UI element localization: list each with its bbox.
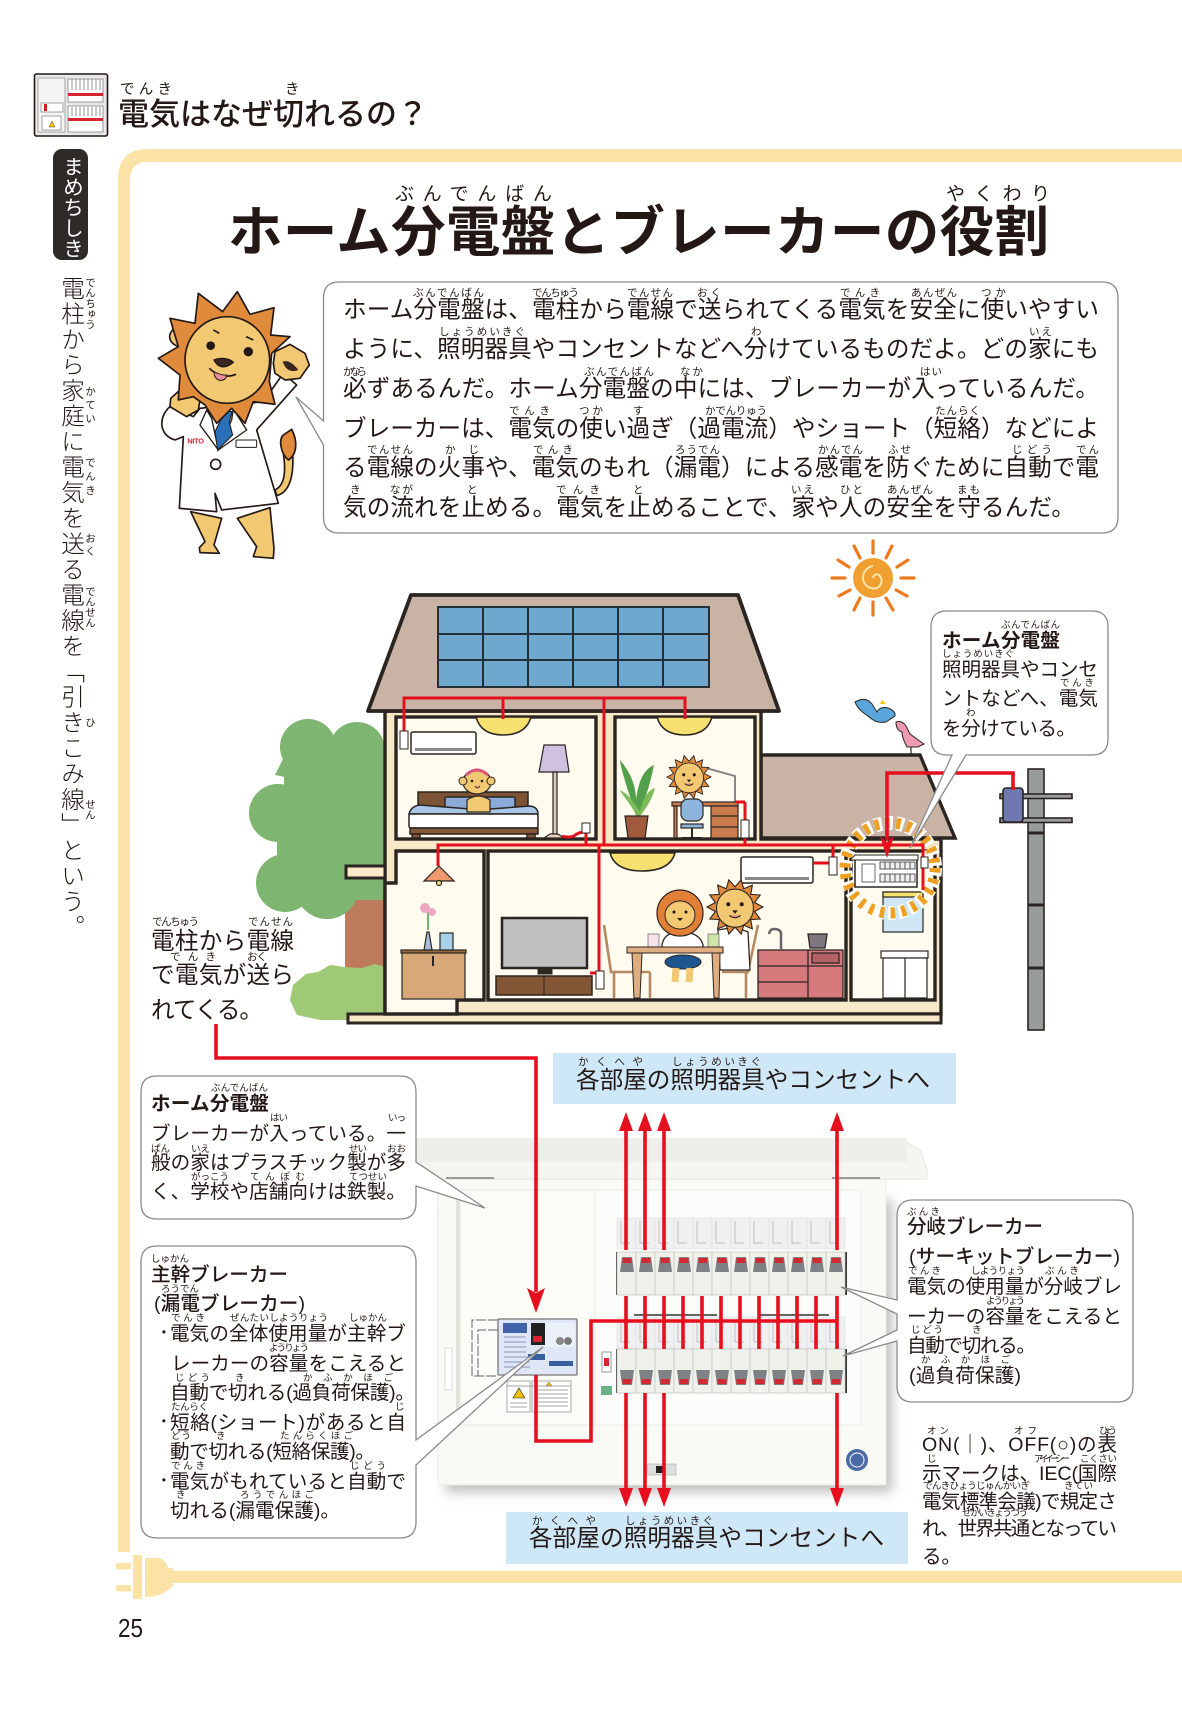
callout: main breaker: たんらく (171, 1402, 208, 1413)
ceiling lights (476, 717, 712, 871)
speech bubble: explanation: ぶんでんばん (413, 287, 484, 299)
callout: home board construction: はい (270, 1113, 288, 1124)
top blue label (553, 1053, 956, 1104)
rooms (385, 717, 935, 1014)
left label: power arrives from pole: 電柱から電線 (151, 928, 294, 955)
callout: home board purpose: を分けている。 (942, 718, 1076, 740)
table (627, 947, 723, 998)
speech bubble: explanation: でんせん (367, 444, 413, 456)
electric pole (1000, 769, 1072, 1030)
left label: power arrives from pole: でんき (170, 951, 216, 963)
tree (249, 719, 385, 1020)
lid (417, 1139, 927, 1179)
icon: distribution board (34, 74, 108, 136)
air conditioners (411, 732, 813, 883)
speech bubble: explanation: かんでん (818, 444, 863, 456)
vertical side note: おく (84, 533, 96, 558)
speech bubble: explanation: でんき (533, 444, 573, 456)
callout: main breaker: き (235, 1373, 245, 1384)
callout: branch breaker: 自動で切れる。 (907, 1335, 1036, 1357)
lion mascot in lab coat: NITO (187, 436, 204, 445)
section heading: why does electricity cut out: き (285, 81, 300, 98)
callout: home board construction: ぱん (151, 1144, 170, 1155)
left label: power arrives from pole: おく (247, 951, 267, 963)
speech bubble: explanation: ひと (840, 484, 863, 496)
speech bubble: explanation: かじ (445, 444, 479, 456)
tag: mamechishiki (53, 149, 88, 260)
incoming line arrow to main breaker (216, 1024, 545, 1313)
speech bubble: explanation: じどう (1012, 444, 1052, 456)
callout: home board purpose: ホーム分電盤 (942, 630, 1060, 652)
callout: branch breaker: しようりょう (971, 1266, 1025, 1277)
callout: home board construction: ぶんでんばん (211, 1083, 268, 1094)
top blue label: しょうめいきぐ (672, 1056, 761, 1068)
speech bubble: explanation: いえ (1029, 326, 1052, 338)
indoor wiring (404, 698, 923, 973)
speech bubble: explanation: まも (957, 484, 980, 496)
speech bubble: explanation: 気の流れを止める。電気を止めることで、家や人の安全を守るんだ。 (343, 494, 1075, 522)
callout: branch breaker: (サーキットブレーカー) (909, 1245, 1120, 1268)
plant (620, 760, 655, 838)
coat (162, 373, 297, 512)
callout: main breaker: ･ (159, 1411, 169, 1433)
callout: main breaker: ぜんたいしようりょう (230, 1313, 328, 1324)
callout: main breaker: ･ (159, 1322, 169, 1344)
callout: home board construction: がっこう (191, 1171, 229, 1183)
speech bubble: explanation: ブレーカーは、電気の使い過ぎ（過電流）やショート（短絡）などによ (343, 416, 1099, 442)
floor slab (348, 1014, 941, 1023)
cups (648, 934, 659, 947)
left label: power arrives from pole: でんせん (248, 916, 293, 928)
callout: main breaker: 主幹ブレーカー (151, 1263, 288, 1286)
vertical side note: でんき (84, 457, 96, 499)
yellow page frame with plug (116, 149, 1182, 1599)
section heading: why does electricity cut out (118, 81, 428, 132)
callout: home board construction: ホーム分電盤 (151, 1093, 269, 1115)
callout: branch breaker: でんき (908, 1266, 941, 1277)
side note: IEC marks: れ、世界共通となってい (922, 1518, 1117, 1540)
side note: IEC marks: でんきひょうじゅんかいぎ (923, 1480, 1030, 1492)
inner cover (460, 1190, 861, 1425)
child lion body (662, 932, 703, 952)
circuit label strips (617, 1218, 845, 1348)
side note: IEC marks: 示マークは、IEC(国際 (922, 1463, 1117, 1485)
callout: home board construction (141, 1076, 485, 1219)
skirt and legs (665, 955, 701, 969)
callout: main breaker: ろうでんほご (240, 1489, 314, 1501)
sockets (400, 731, 928, 989)
callout: branch breaker: ぶんき (1045, 1266, 1079, 1277)
bottom blue label: かくへや (532, 1515, 596, 1527)
callout: branch breaker: (過負荷保護) (909, 1365, 1021, 1387)
vertical side note: 電柱から家庭に電気を送る電線を「引きこみ線」という。 (57, 276, 85, 940)
callout: main breaker: しゅかん (349, 1313, 387, 1324)
bottom blue label: 各部屋の照明器具やコンセントへ (529, 1525, 884, 1552)
speech bubble: explanation: たんらく (935, 405, 980, 417)
branch wiring (536, 1128, 837, 1490)
vertical side note (57, 276, 96, 940)
speech bubble: explanation: しょうめいきぐ (439, 326, 525, 338)
panel body (438, 1179, 886, 1485)
solar panels (438, 607, 709, 687)
side note: IEC marks: じ (927, 1454, 937, 1465)
lower branch breakers (616, 1349, 847, 1393)
speech bubble: explanation: す (633, 405, 644, 417)
side roof (761, 755, 955, 838)
side note: IEC marks: ON(｜)、OFF(○)の表 (922, 1433, 1117, 1456)
top blue label: 各部屋の照明器具やコンセントへ (576, 1067, 930, 1094)
callout: home board purpose: ぶんでんばん (1001, 620, 1060, 631)
speech bubble: explanation: かなら (343, 366, 367, 378)
callout: main breaker: ようりょう (269, 1343, 309, 1354)
speech bubble: explanation: ホーム分電盤は、電柱から電線で送られてくる電気を安全に使いやすい (343, 296, 1099, 324)
left label: power arrives from pole (151, 916, 294, 1024)
father lion body (718, 927, 750, 970)
panel shadow (446, 1200, 892, 1492)
callout: main breaker: じどう (350, 1461, 386, 1472)
pink bird (896, 722, 924, 747)
callout: home board purpose: ントなどへ、電気 (942, 688, 1098, 710)
washroom (881, 892, 928, 998)
speech bubble: explanation: でんき (509, 405, 550, 417)
callout: branch breaker: 電気の使用量が分岐ブレ (907, 1275, 1122, 1298)
callout: main breaker: ろうでん (161, 1284, 199, 1295)
hinges (446, 1177, 880, 1179)
callout: main breaker: 自動で切れる(過負荷保護)。 (170, 1382, 415, 1404)
speech bubble: explanation: でんき (840, 287, 880, 299)
bottom blue label (506, 1512, 908, 1564)
speech bubble: explanation: ように、照明器具やコンセントなどへ分けているものだよ。どの家にも (343, 336, 1099, 363)
callout: main breaker: 電気がもれていると自動で (170, 1471, 406, 1493)
board glow ring (845, 823, 935, 913)
speech bubble: explanation: つか (579, 405, 604, 417)
side note: IEC marks: せかいきょうつう (962, 1508, 1028, 1519)
side note: IEC marks: アイイーシー (1034, 1454, 1070, 1465)
speech bubble: explanation: と (467, 484, 478, 496)
vertical side note: でんせん (84, 586, 96, 628)
speech bubble: explanation: わ (751, 326, 762, 338)
page number: 25 (118, 1613, 143, 1643)
desk with lamp and lion (672, 768, 738, 838)
vertical side note: かてい (84, 386, 96, 426)
callout: branch breaker: ようりょう (986, 1296, 1025, 1307)
callout: main breaker: 切れる(漏電保護)。 (170, 1500, 340, 1522)
speech bubble: explanation: でんせん (627, 287, 673, 299)
callout: main breaker: でんき (171, 1313, 205, 1324)
side note: IEC marks: オン (927, 1426, 949, 1437)
upper branch breakers (616, 1252, 847, 1295)
vertical side note: ひ (84, 717, 96, 728)
kitchen (758, 934, 843, 998)
speech bubble: explanation: 必ずあるんだ。ホーム分電盤の中には、ブレーカーが入っているんだ。 (343, 376, 1099, 402)
cabinet with vase (401, 932, 466, 999)
callout: home board construction: 般の家はプラスチック製が多 (151, 1152, 406, 1174)
callout: home board purpose (910, 611, 1108, 848)
callout: main breaker: レーカーの容量をこえると (171, 1353, 406, 1375)
callout: main breaker: ･ (159, 1470, 169, 1492)
callout: main breaker: き (216, 1431, 226, 1442)
main title: やくわり (946, 183, 1050, 205)
main title: ぶんでんばん (395, 183, 552, 205)
callout: home board construction: てつせい (349, 1172, 387, 1183)
service line from pole with arrow (880, 773, 1013, 858)
switchboard (417, 1112, 927, 1507)
callout: branch breaker (841, 1200, 1133, 1402)
right leg (237, 508, 274, 558)
callout: main breaker: しゅかん (151, 1254, 189, 1265)
lion mascot in lab coat (158, 292, 309, 558)
left label: power arrives from pole: でんちゅう (152, 916, 199, 928)
main roof (368, 595, 779, 711)
callout: branch breaker: ーカーの容量をこえると (907, 1306, 1122, 1328)
chairs (604, 925, 758, 998)
house body (385, 711, 941, 1014)
on off mark (601, 1352, 612, 1395)
floor lamp (539, 745, 569, 838)
callout: main breaker: 短絡(ショート)があると自 (170, 1412, 406, 1434)
callout: main breaker: (漏電ブレーカー) (154, 1292, 305, 1315)
speech bubble: explanation: でんちゅう (532, 287, 579, 299)
side note: IEC marks: こくさい (1080, 1454, 1117, 1465)
speech bubble: explanation: き (350, 484, 360, 496)
speech bubble: explanation: なか (680, 366, 704, 378)
left label: power arrives from pole: で電気が送ら (151, 962, 294, 989)
balcony stub (346, 866, 385, 878)
speech bubble: explanation: かでんりゅう (705, 405, 767, 417)
main breaker (472, 1319, 577, 1376)
speech bubble: explanation: はい (920, 366, 942, 378)
speech bubble: explanation: ろうでん (675, 444, 720, 456)
callout: main breaker: でんき (171, 1461, 205, 1472)
bottom blue label: しょうめいきぐ (625, 1515, 713, 1527)
side note: IEC marks: オフ (1014, 1426, 1037, 1437)
tag: mamechishiki: まめちしき (60, 156, 83, 258)
side note: IEC marks: 電気標準会議)で規定さ (922, 1491, 1117, 1513)
callout: main breaker: じ (395, 1402, 405, 1413)
callout: main breaker: じどう (175, 1373, 210, 1384)
speech bubble: explanation: ふせ (888, 444, 911, 456)
home distribution board in house (850, 855, 918, 887)
callout: home board construction: てんぽむ (250, 1172, 305, 1183)
warning labels (507, 1381, 571, 1412)
callout: main breaker: どう (171, 1431, 191, 1442)
callout: home board construction: いえ (191, 1144, 210, 1155)
callout: main breaker: 動で切れる(短絡保護)。 (170, 1441, 375, 1463)
side note: IEC marks: る。 (922, 1546, 961, 1568)
callout: main breaker (141, 1246, 543, 1538)
callout: home board purpose: 照明器具やコンセ (942, 659, 1098, 681)
birds (855, 699, 924, 754)
icon: sun (832, 541, 914, 615)
side note: IEC marks: きてい (1064, 1481, 1093, 1492)
callout: home board construction: く、学校や店舗向けは鉄製。 (151, 1181, 406, 1203)
speech bubble: explanation: あんぜん (887, 484, 933, 496)
television (496, 918, 592, 995)
dining set with family (604, 880, 763, 998)
callout: home board purpose: でんき (1060, 678, 1094, 689)
house cross-section (346, 595, 1072, 1030)
callout: branch breaker: ぶんき (907, 1207, 940, 1218)
speech bubble: explanation: ぶんでんばん (584, 366, 654, 378)
speech bubble: explanation: あんぜん (911, 287, 957, 299)
speech bubble: explanation (296, 282, 1118, 533)
speech bubble: explanation: つか (981, 287, 1006, 299)
callout: branch breaker: かふかほご (921, 1354, 1010, 1366)
callout: branch breaker: じどう (911, 1325, 943, 1336)
callout: main breaker: 電気の全体使用量が主幹ブ (170, 1322, 406, 1345)
callout: home board purpose: わ (966, 708, 976, 719)
callout: home board construction: せい (349, 1144, 367, 1155)
callout: branch breaker: 分岐ブレーカー (907, 1215, 1043, 1238)
hanging lamp (424, 866, 454, 886)
vertical side note: せん (84, 799, 96, 820)
main title: ホーム分電盤とブレーカーの役割 (228, 202, 1049, 263)
left leg (191, 512, 222, 553)
down arrows (619, 1488, 844, 1507)
tail (275, 453, 293, 496)
speech bubble: explanation: おく (697, 287, 721, 299)
callout: main breaker: かふかほご (303, 1372, 393, 1384)
speech bubble: explanation: と (633, 484, 644, 496)
speech bubble: explanation: でん (1076, 444, 1099, 456)
speech bubble: explanation: いえ (791, 484, 814, 496)
callout: main breaker: たんらくほご (280, 1430, 353, 1442)
section heading: why does electricity cut out: 電気はなぜ切れるの？ (118, 97, 428, 132)
side note: IEC marks: ひょう (1099, 1426, 1117, 1437)
section heading: why does electricity cut out: でんき (120, 81, 172, 98)
speech bubble: explanation: なが (390, 483, 414, 496)
side note: IEC marks (922, 1426, 1117, 1568)
speech bubble: explanation: でんき (556, 484, 600, 496)
bed (409, 792, 538, 838)
blue bird (855, 699, 895, 722)
small latch and certification seal (646, 1449, 868, 1475)
left label: power arrives from pole: れてくる。 (151, 998, 263, 1024)
callout: home board construction: ブレーカーが入っている。一 (151, 1122, 406, 1145)
speech bubble: explanation: る電線の火事や、電気のもれ（漏電）による感電を防ぐために自動で電 (343, 454, 1099, 482)
callout: home board construction: いっ (388, 1113, 406, 1124)
up arrows (619, 1112, 844, 1131)
top blue label: かくへや (578, 1056, 643, 1068)
callout: home board purpose: しょうめいきぐ (942, 649, 1014, 660)
callout: branch breaker: き (972, 1325, 982, 1336)
callout: home board construction: おお (387, 1144, 406, 1155)
vertical side note: でんちゅう (84, 277, 96, 330)
small lion on bed (459, 770, 495, 812)
callout: main breaker: き (176, 1490, 186, 1501)
